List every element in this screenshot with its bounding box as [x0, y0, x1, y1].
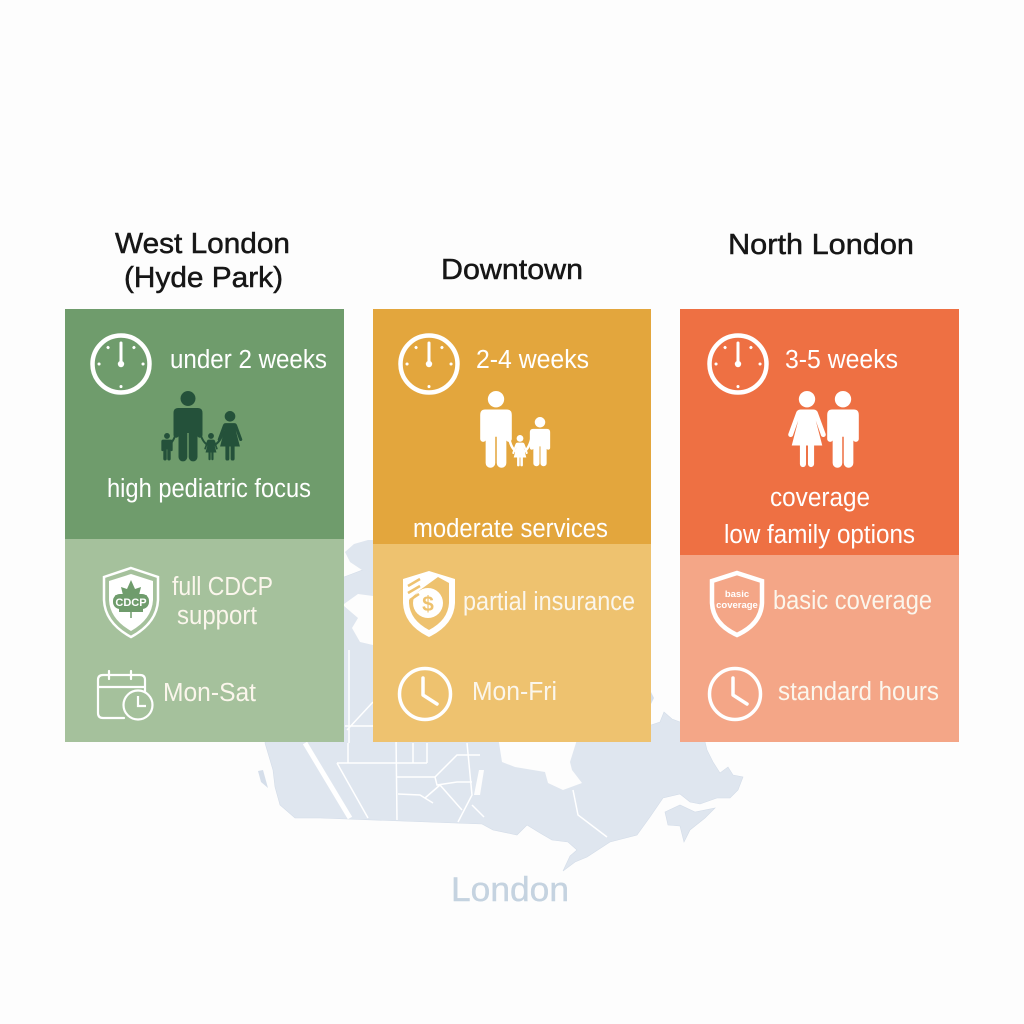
wait time text: 2-4 weeks	[476, 346, 589, 374]
coverage text: partial insurance	[463, 588, 635, 616]
icon: basic coverage shield	[712, 573, 762, 635]
wait time text: 3-5 weeks	[785, 346, 898, 374]
hours text: standard hours	[778, 678, 939, 706]
icon: wait clock	[710, 336, 766, 392]
service text: moderate services	[413, 515, 608, 543]
icon: basic coverage shield: coverage	[716, 600, 758, 611]
icon: hours clock	[710, 668, 760, 720]
panel top: Downtown wait and services	[373, 309, 651, 544]
panel: Downtown	[373, 254, 651, 742]
icon: insurance shield: $	[422, 593, 434, 616]
panel: West London	[65, 228, 344, 742]
icon: family of four	[161, 391, 242, 461]
heading: West London: West London	[115, 228, 290, 260]
icon: wait clock	[400, 336, 458, 392]
icon: wait clock	[92, 336, 150, 392]
panel bottom: West London coverage and hours	[65, 539, 344, 742]
heading: Downtown: Downtown	[441, 254, 583, 286]
service text: coverage: coverage	[770, 484, 870, 512]
map label: London: London	[451, 871, 569, 909]
hours text: Mon-Sat	[163, 679, 256, 707]
hours text: Mon-Fri	[472, 678, 557, 706]
icon: insurance shield	[403, 571, 455, 637]
map of Canada	[258, 540, 743, 871]
service text: low family options: low family options	[724, 521, 915, 549]
service text: high pediatric focus	[107, 475, 311, 503]
wait time text: under 2 weeks	[170, 346, 327, 374]
panel top: North London wait and services	[680, 309, 959, 555]
icon: hours clock	[400, 668, 450, 720]
icon: couple	[788, 391, 859, 468]
panel top: West London wait and services	[65, 309, 344, 539]
icon: CDCP shield	[104, 568, 158, 637]
panel: North London	[680, 229, 959, 742]
heading: North London: North London	[728, 229, 914, 261]
icon: family of three	[480, 391, 550, 468]
icon: CDCP shield: CDCP	[115, 597, 147, 609]
heading: Hyde Park: (Hyde Park)	[124, 262, 283, 294]
icon: basic coverage shield: basic	[725, 589, 749, 600]
coverage text line 2: support	[177, 602, 257, 630]
panel bottom: North London coverage and hours	[680, 555, 959, 742]
coverage text: basic coverage	[773, 587, 932, 615]
icon: calendar with clock	[98, 671, 152, 720]
coverage text: full CDCP	[172, 573, 273, 601]
panel bottom: Downtown coverage and hours	[373, 544, 651, 742]
